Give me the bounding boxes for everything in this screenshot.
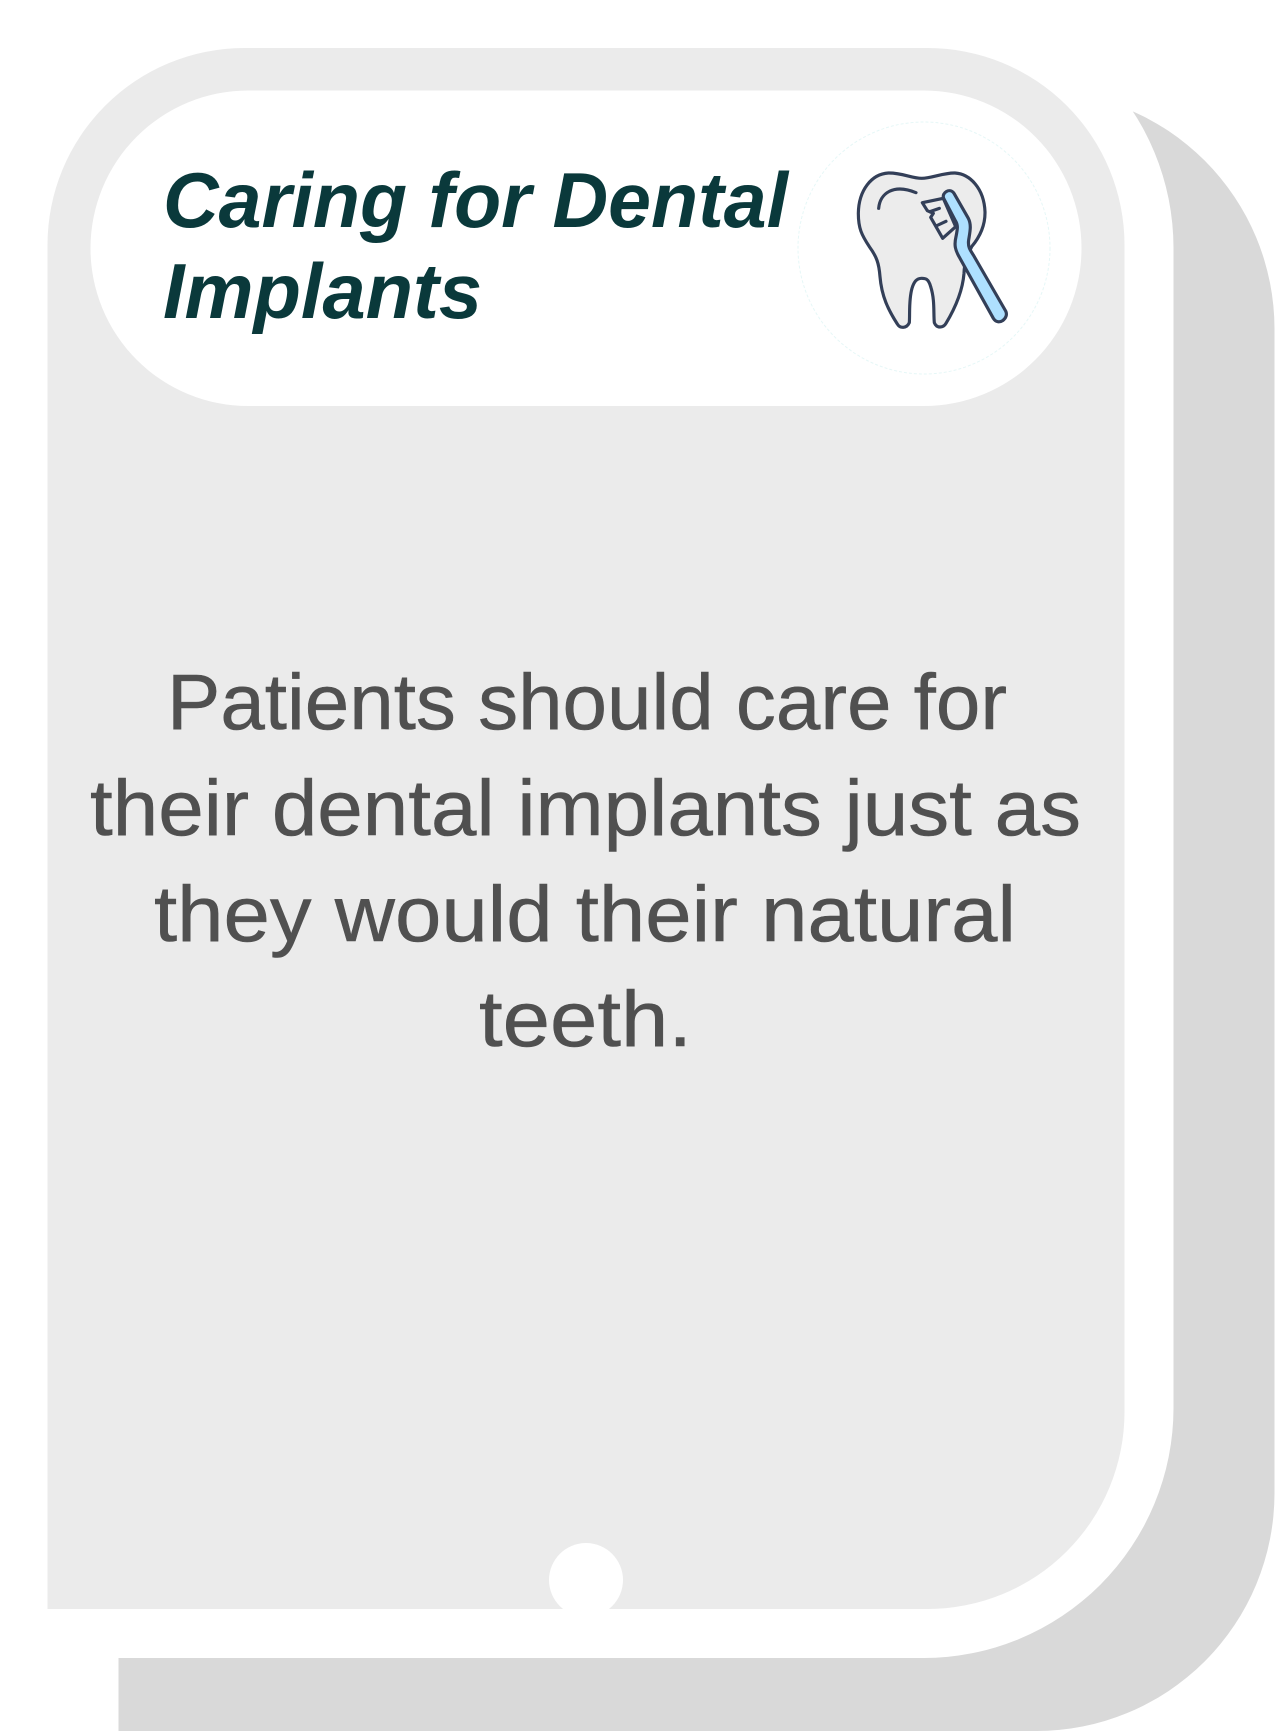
body text: [90, 657, 1081, 1063]
title: [163, 156, 789, 335]
icon circle outline: [798, 122, 1050, 374]
bristle ticks: [930, 208, 946, 226]
tooth: [858, 173, 985, 327]
body text: they would their natural: [154, 869, 1016, 958]
tooth highlight: [879, 189, 916, 208]
title: Implants: [163, 247, 482, 335]
body text: teeth.: [479, 974, 692, 1063]
body text: Patients should care for: [167, 657, 1007, 746]
body text: their dental implants just as: [90, 763, 1081, 852]
toothbrush handle: [943, 191, 1006, 322]
bottom circular button: [549, 1543, 623, 1617]
header pill: [90, 90, 1082, 406]
icon: tooth with toothbrush: [858, 173, 1006, 327]
toothbrush bristles: [922, 198, 956, 238]
title: Caring for Dental: [163, 156, 789, 244]
panel: main grey card: [48, 48, 1124, 1609]
